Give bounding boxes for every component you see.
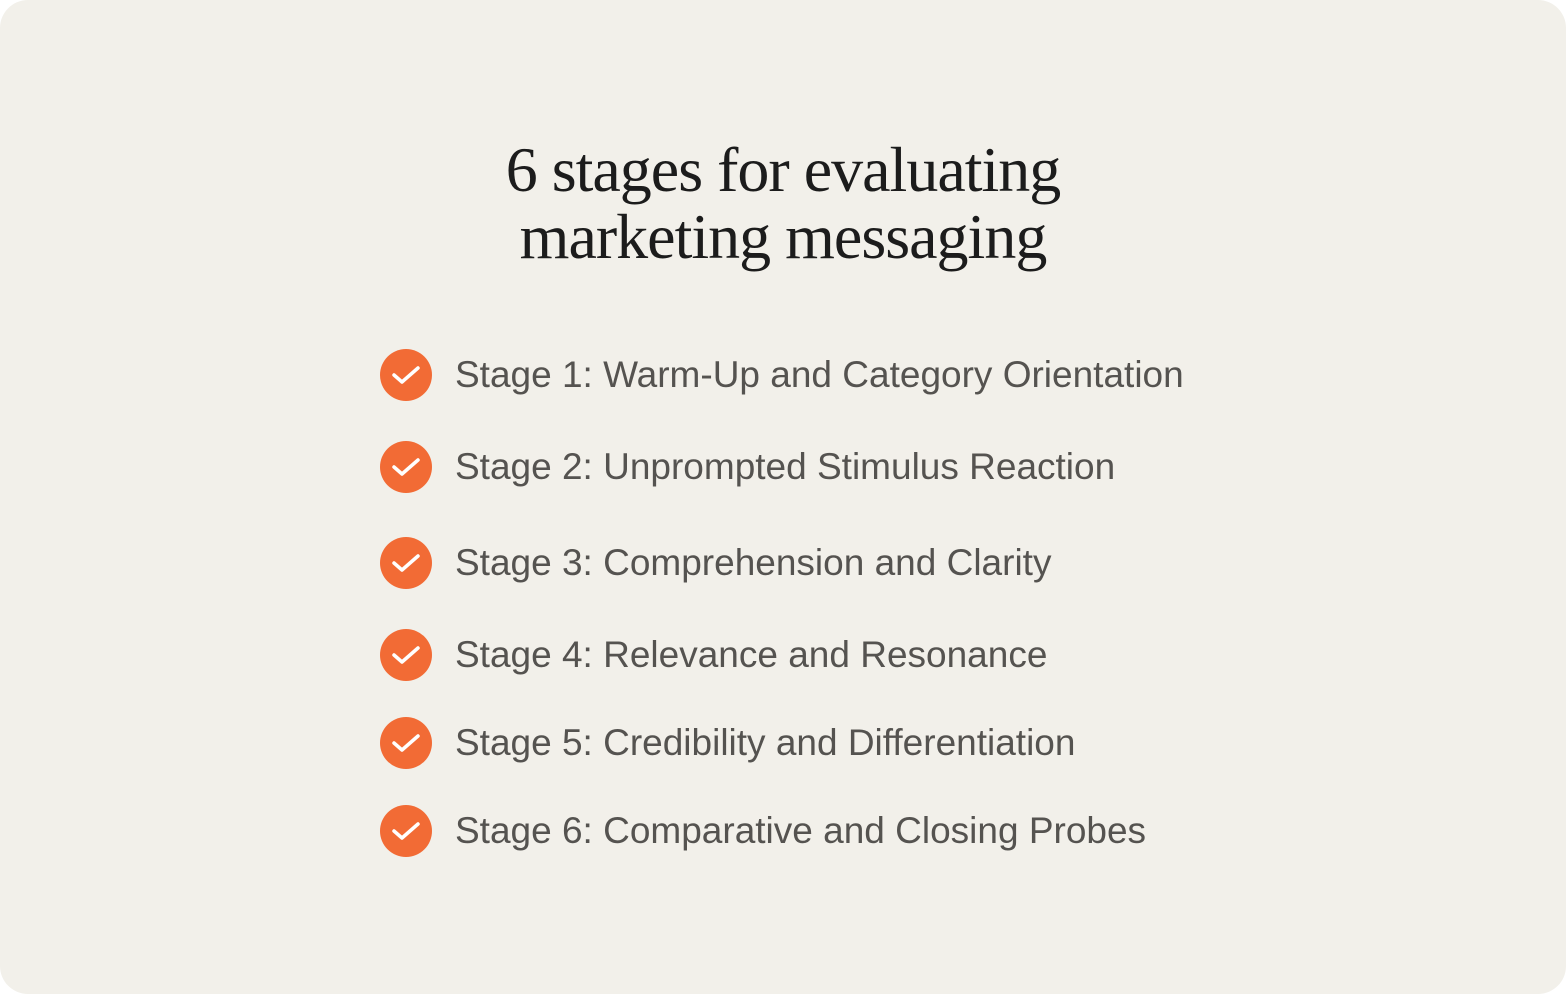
stage 4 xyxy=(380,629,1047,681)
icon: check xyxy=(380,805,432,857)
title xyxy=(506,134,1060,272)
icon: check xyxy=(380,717,432,769)
icon: check xyxy=(380,441,432,493)
stage 1 xyxy=(380,349,1184,401)
text: Stage 6: Comparative and Closing Probes xyxy=(455,810,1146,851)
stage 3 xyxy=(380,537,1052,589)
stage 6 xyxy=(380,805,1146,857)
text: Stage 4: Relevance and Resonance xyxy=(455,634,1047,675)
stage 5 xyxy=(380,717,1075,769)
icon: check xyxy=(380,537,432,589)
title: 6 stages for evaluating xyxy=(506,134,1060,205)
text: Stage 5: Credibility and Differentiation xyxy=(455,722,1075,763)
icon: check xyxy=(380,629,432,681)
stage 2 xyxy=(380,441,1115,493)
icon: check xyxy=(380,349,432,401)
title: marketing messaging xyxy=(520,201,1046,272)
text: Stage 2: Unprompted Stimulus Reaction xyxy=(455,446,1115,487)
text: Stage 1: Warm-Up and Category Orientation xyxy=(455,354,1184,395)
text: Stage 3: Comprehension and Clarity xyxy=(455,542,1051,583)
